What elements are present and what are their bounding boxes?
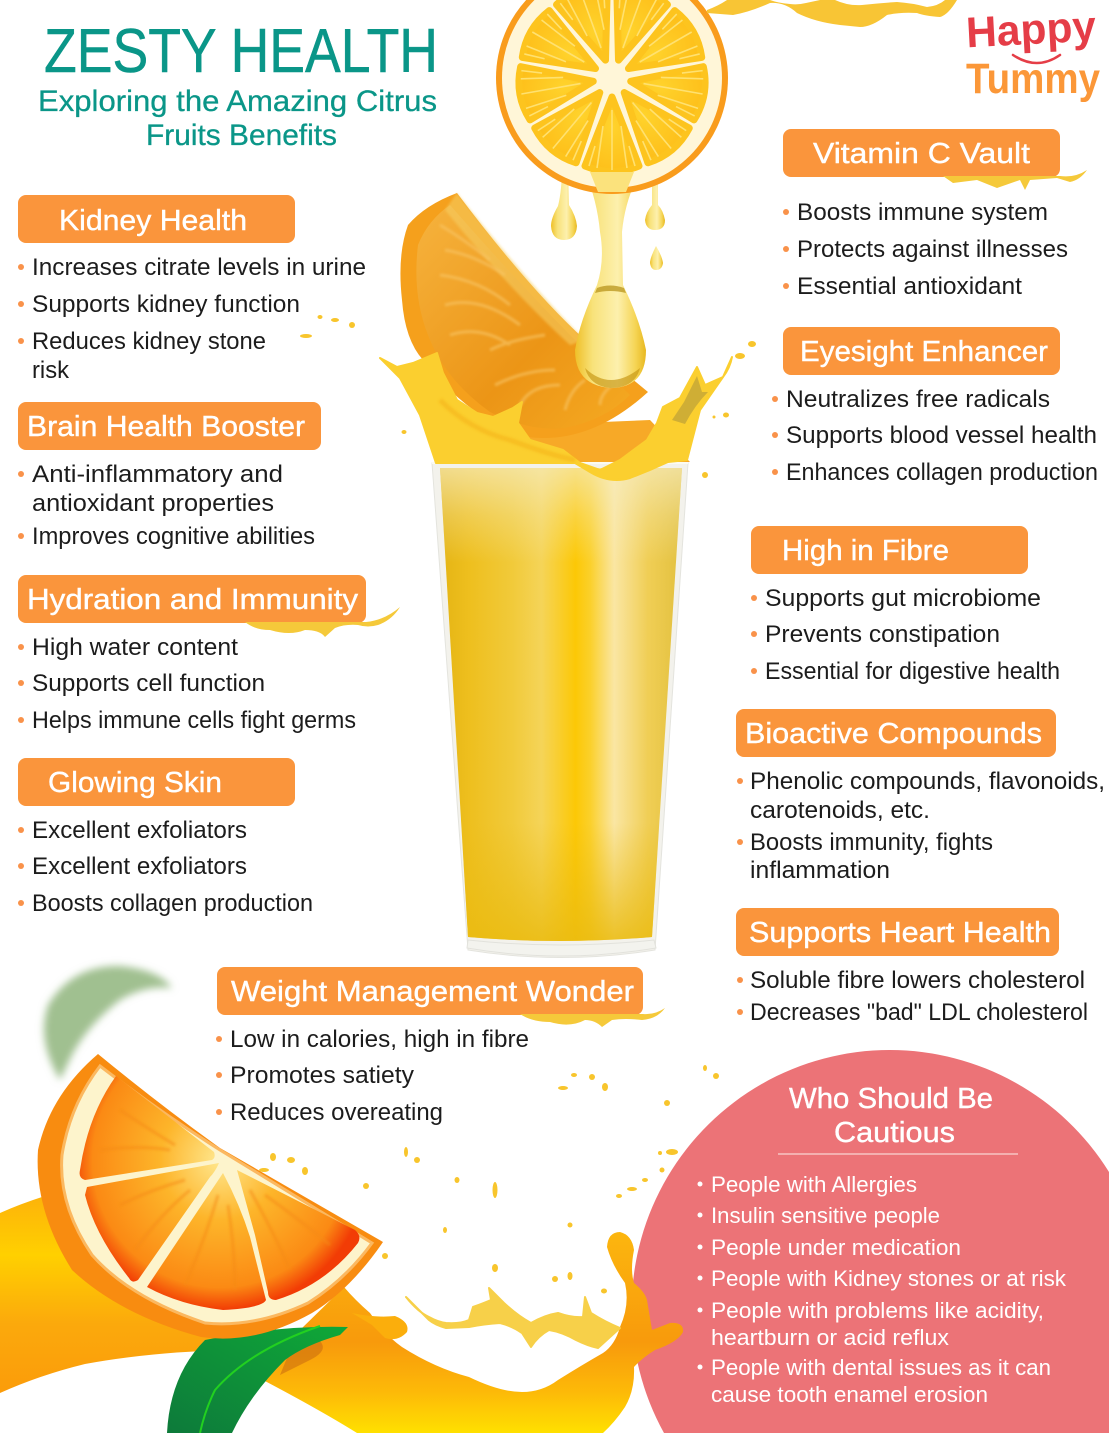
list: bioactive points: carotenoids, etc.	[750, 797, 930, 824]
scattered juice droplets	[259, 315, 756, 1294]
panel: glowing skin	[18, 758, 313, 917]
list: vitamin c points: Boosts immune system	[797, 199, 1048, 226]
heading: weight management wonder	[217, 967, 665, 1027]
orange citrus slice top	[496, 0, 728, 194]
list: brain health points: Anti-inflammatory and	[32, 461, 283, 488]
list: kidney health points	[18, 254, 366, 384]
list: hydration points	[18, 634, 356, 734]
list: bioactive points: Phenolic compounds, flavonoids,	[750, 768, 1105, 795]
pink caution circle background	[632, 1050, 1109, 1433]
panel: vitamin c vault	[783, 129, 1087, 300]
heading: supports heart health	[736, 908, 1059, 956]
heading: eyesight enhancer	[783, 327, 1060, 375]
list: bioactive points	[737, 768, 1105, 884]
list: brain health points: Improves cognitive abilities	[32, 523, 315, 550]
list: brain health points	[18, 461, 315, 550]
bottom orange juice swoosh	[0, 1196, 683, 1433]
list: heart health points	[737, 967, 1088, 1026]
list: kidney health points: risk	[32, 357, 70, 384]
heading: who should be cautious	[778, 1083, 1018, 1154]
list: weight management points: Low in calories, high in fibre	[230, 1026, 529, 1053]
heading: eyesight enhancer: Eyesight Enhancer	[800, 336, 1048, 368]
heading: glowing skin: Glowing Skin	[48, 767, 222, 799]
list: cautious groups: People with Kidney stones or at risk	[711, 1266, 1067, 1291]
list: cautious groups: cause tooth enamel erosion	[711, 1382, 988, 1407]
light yellow splash wave	[406, 1288, 620, 1348]
list: hydration points: High water content	[32, 634, 238, 661]
heading: kidney health: Kidney Health	[59, 205, 247, 237]
front juice wave over glass rim	[380, 353, 732, 480]
list: kidney health points: Reduces kidney stone	[32, 328, 266, 355]
juice ribbon top right	[707, 0, 957, 27]
orange wedge	[400, 193, 648, 438]
list: fibre points: Essential for digestive health	[765, 658, 1060, 685]
panel: supports heart health	[736, 908, 1088, 1026]
heading: supports heart health: Supports Heart Health	[749, 917, 1051, 949]
logo: Happy Tummy	[965, 3, 1100, 103]
title: Exploring the Amazing Citrus	[38, 85, 437, 118]
panel: weight management wonder	[216, 967, 665, 1126]
list: hydration points: Helps immune cells fight germs	[32, 707, 356, 734]
panel: kidney health	[18, 195, 366, 384]
green leaf	[167, 1326, 348, 1433]
panel: who should be cautious	[698, 1083, 1067, 1407]
heading: hydration and immunity	[18, 575, 400, 637]
list: cautious groups: People with Allergies	[711, 1172, 917, 1197]
list: bioactive points: inflammation	[750, 857, 890, 884]
list: eyesight points: Enhances collagen production	[786, 459, 1098, 486]
heading: high in fibre	[751, 526, 1028, 574]
heading: hydration and immunity: Hydration and Immunity	[27, 584, 359, 616]
list: cautious groups	[698, 1172, 1067, 1407]
title: Fruits Benefits	[146, 119, 337, 152]
panel: eyesight enhancer	[772, 327, 1098, 486]
list: hydration points: Supports cell function	[32, 670, 265, 697]
juice splash behind glass	[500, 420, 690, 465]
list: fibre points: Supports gut microbiome	[765, 585, 1041, 612]
list: vitamin c points: Protects against illnesses	[797, 236, 1068, 263]
heading: who should be cautious: Cautious	[834, 1117, 955, 1149]
blurred background leaf	[44, 966, 172, 1080]
list: fibre points	[751, 585, 1060, 685]
list: glowing skin points: Excellent exfoliators	[32, 817, 247, 844]
list: cautious groups: heartburn or acid reflux	[711, 1325, 949, 1350]
panel: hydration and immunity	[18, 575, 400, 734]
list: glowing skin points: Boosts collagen production	[32, 890, 313, 917]
list: kidney health points: Supports kidney function	[32, 291, 300, 318]
list: cautious groups: People under medication	[711, 1235, 961, 1260]
heading: brain health booster	[18, 402, 321, 450]
juice stream and drops	[551, 165, 665, 388]
panel: bioactive compounds	[736, 709, 1105, 884]
heading: vitamin c vault: Vitamin C Vault	[813, 138, 1030, 170]
heading: who should be cautious: Who Should Be	[789, 1083, 993, 1115]
list: glowing skin points	[18, 817, 313, 917]
list: brain health points: antioxidant properties	[32, 490, 274, 517]
list: weight management points: Promotes satiety	[230, 1062, 414, 1089]
list: vitamin c points: Essential antioxidant	[797, 273, 1022, 300]
glass of orange juice	[432, 463, 688, 958]
panel: brain health booster	[18, 402, 321, 550]
heading: high in fibre: High in Fibre	[782, 535, 949, 567]
logo: Happy Tummy: Happy	[965, 3, 1097, 57]
title	[38, 17, 438, 152]
list: eyesight points: Neutralizes free radicals	[786, 386, 1050, 413]
list: kidney health points: Increases citrate levels in urine	[32, 254, 366, 281]
list: cautious groups: People with dental issues as it can	[711, 1355, 1051, 1380]
list: eyesight points: Supports blood vessel health	[786, 422, 1097, 449]
list: fibre points: Prevents constipation	[765, 621, 1000, 648]
list: heart health points: Soluble fibre lowers cholesterol	[750, 967, 1085, 994]
list: heart health points: Decreases "bad" LDL cholesterol	[750, 999, 1088, 1026]
list: cautious groups: Insulin sensitive people	[711, 1203, 940, 1228]
heading: kidney health	[18, 195, 295, 243]
orange half slice	[38, 1054, 383, 1339]
list: cautious groups: People with problems like acidity,	[711, 1298, 1044, 1323]
list: eyesight points	[772, 386, 1098, 486]
title: ZESTY HEALTH	[44, 17, 438, 86]
heading: bioactive compounds	[736, 709, 1056, 757]
panel: high in fibre	[751, 526, 1060, 685]
heading: brain health booster: Brain Health Booster	[27, 411, 305, 443]
list: weight management points: Reduces overeating	[230, 1099, 443, 1126]
list: vitamin c points	[783, 199, 1068, 300]
list: weight management points	[216, 1026, 529, 1126]
heading: weight management wonder: Weight Management Wonder	[231, 976, 634, 1008]
heading: glowing skin	[18, 758, 295, 806]
list: bioactive points: Boosts immunity, fights	[750, 829, 993, 856]
heading: vitamin c vault	[783, 129, 1087, 190]
list: glowing skin points: Excellent exfoliators	[32, 853, 247, 880]
heading: bioactive compounds: Bioactive Compounds	[745, 718, 1042, 750]
